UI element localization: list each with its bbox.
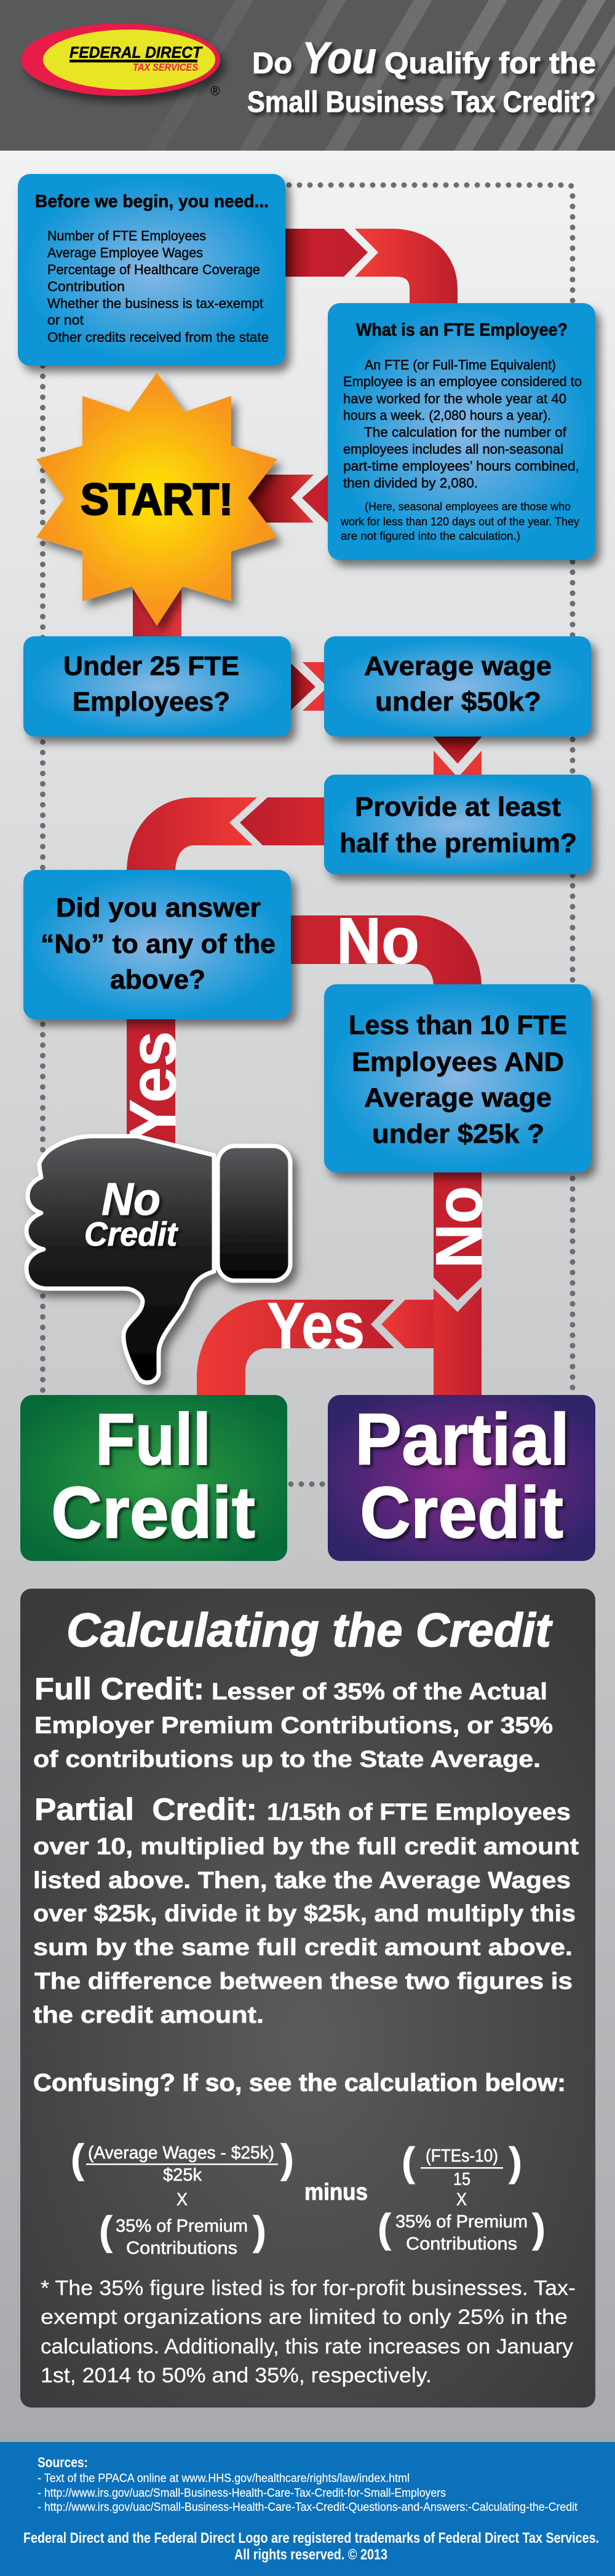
checklist: Contribution	[47, 279, 125, 294]
box: under 25 FTE: Under 25 FTE	[63, 651, 239, 681]
box: provide half the premium	[324, 775, 591, 874]
formula: left term: (	[71, 2136, 84, 2181]
formula: left term: X	[177, 2190, 188, 2210]
checklist: or not	[47, 312, 84, 328]
arrow: Yes branch to full credit	[197, 1289, 434, 1397]
label: Yes: Yes	[267, 1289, 365, 1362]
formula: right term: 35% of Premium	[395, 2212, 528, 2232]
logo: Federal Direct Tax Services: ®	[210, 84, 220, 98]
dotted path	[43, 185, 573, 1484]
box: provide half the premium: Provide at least	[355, 792, 561, 822]
sources	[38, 2454, 578, 2514]
panel: calculating the credit	[20, 1589, 595, 2408]
start star	[36, 373, 277, 626]
no credit label: No	[101, 1174, 161, 1225]
checklist: Whether the business is tax-exempt	[47, 296, 263, 311]
definition text: Employee is an employee considered to	[343, 374, 582, 389]
logo: Federal Direct Tax Services: FEDERAL DIRECT	[69, 43, 203, 61]
logo: Federal Direct Tax Services	[21, 23, 220, 98]
formula: right term: )	[532, 2205, 546, 2251]
no credit label	[84, 1174, 179, 1253]
title: You	[302, 34, 376, 83]
box: less than 10 FTE: Less than 10 FTE	[349, 1010, 567, 1040]
seasonal note: (Here, seasonal employees are those who	[365, 500, 571, 513]
partial credit explanation: listed above. Then, take the Average Wages	[33, 1868, 571, 1894]
minus: minus	[304, 2179, 368, 2205]
arrow: average wage down	[434, 735, 482, 776]
formula: right term: X	[456, 2190, 467, 2210]
heading: What is an FTE Employee?	[356, 320, 568, 340]
label: No: No	[422, 1186, 496, 1268]
partial credit explanation: the credit amount.	[33, 2002, 264, 2028]
formula: right term: (FTEs-10)	[426, 2146, 498, 2166]
full credit explanation: Employer Premium Contributions, or 35%	[34, 1713, 553, 1739]
arrow: provide premium to did you answer	[127, 797, 326, 873]
box: less than 10 FTE: Average wage	[364, 1083, 552, 1113]
label: Yes: Yes	[116, 1031, 189, 1142]
formula: right term	[378, 2139, 546, 2254]
checklist: Number of FTE Employees	[47, 228, 206, 243]
heading: Before we begin, you need...	[35, 192, 269, 211]
arrow: Yes branch to no credit	[116, 1017, 189, 1147]
start star: START!	[81, 475, 233, 524]
definition text: part-time employees’ hours combined,	[343, 459, 579, 473]
box: full credit	[20, 1395, 287, 1561]
header band	[0, 0, 615, 151]
partial credit explanation: over $25k, divide it by $25k, and multiply this	[33, 1901, 576, 1927]
box: did you answer no: “No” to any of the	[41, 929, 276, 959]
formula: left term: )	[280, 2136, 294, 2181]
trademark notice	[23, 2530, 599, 2563]
partial credit explanation: over 10, multiplied by the full credit amount	[33, 1834, 579, 1860]
arrow: No branch to partial credit	[422, 1171, 496, 1397]
trademark notice: All rights reserved. © 2013	[234, 2546, 387, 2563]
box: average wage under 50k: Average wage	[364, 651, 552, 681]
heading: Calculating the Credit	[66, 1604, 553, 1657]
definition text	[343, 357, 582, 491]
full credit explanation: of contributions up to the State Average.	[33, 1747, 541, 1772]
full credit explanation	[33, 1672, 553, 1772]
box: less than 10 FTE: under $25k ?	[372, 1119, 544, 1149]
arrow: No branch	[289, 904, 482, 987]
box: did you answer no: above?	[110, 965, 205, 995]
box: full credit: Credit	[51, 1472, 255, 1554]
box: full credit: Full	[95, 1399, 211, 1480]
sources: - http://www.irs.gov/uac/Small-Business-Health-Care-Tax-Credit-Questions-and-Answers:-Calculating-the-Credit	[38, 2501, 578, 2514]
full credit explanation: Lesser of 35% of the Actual	[212, 1679, 547, 1705]
box: partial credit	[328, 1395, 595, 1561]
footnote: calculations. Additionally, this rate increases on January	[41, 2335, 573, 2358]
footnote: * The 35% figure listed is for for-profit businesses. Tax-	[41, 2277, 576, 2300]
formula: left term: Contributions	[126, 2238, 237, 2258]
partial credit explanation: The difference between these two figures is	[34, 1969, 573, 1994]
definition text: An FTE (or Full-Time Equivalent)	[365, 357, 556, 373]
box: provide half the premium: half the premium?	[339, 828, 577, 858]
footer	[0, 2442, 615, 2576]
partial credit explanation: 1/15th of FTE Employees	[267, 1800, 571, 1825]
box: less than 10 FTE: Employees AND	[352, 1047, 564, 1077]
sources: - Text of the PPACA online at www.HHS.gov/healthcare/rights/law/index.html	[38, 2472, 410, 2485]
checklist: Other credits received from the state	[47, 330, 269, 345]
box: did you answer no	[23, 870, 291, 1019]
formula: right term: 15	[453, 2170, 470, 2189]
arrow: start down	[133, 584, 181, 639]
formula: right term: (	[402, 2139, 415, 2184]
label: No: No	[336, 904, 419, 978]
checklist	[47, 228, 269, 345]
formula: right term: )	[509, 2139, 522, 2184]
panel: before we begin	[18, 174, 285, 366]
formula: left term	[71, 2136, 294, 2258]
full credit explanation: Full Credit:	[34, 1672, 204, 1706]
footnote: exempt organizations are limited to only 25% in the	[41, 2305, 568, 2329]
confusing line: Confusing? If so, see the calculation below:	[33, 2069, 566, 2096]
partial credit explanation	[33, 1792, 579, 2028]
box: average wage under 50k: under $50k?	[375, 687, 541, 717]
title: Do	[252, 47, 292, 80]
title: Qualify for the	[384, 47, 596, 80]
sources: - http://www.irs.gov/uac/Small-Business-Health-Care-Tax-Credit-for-Small-Employers	[38, 2487, 446, 2500]
definition text: The calculation for the number of	[364, 424, 567, 440]
definition text: have worked for the whole year at 40	[343, 391, 566, 406]
formula: left term: $25k	[163, 2165, 202, 2185]
box: partial credit: Partial	[355, 1399, 569, 1480]
box: partial credit: Credit	[360, 1472, 563, 1554]
box: average wage under 50k	[324, 636, 591, 737]
formula: left term: (Average Wages - $25k)	[88, 2143, 274, 2163]
arrow: needs to FTE	[283, 229, 458, 307]
panel: what is an FTE employee	[328, 303, 595, 560]
arrow: under 25 to average wage	[289, 662, 326, 711]
partial credit explanation: sum by the same full credit amount above.	[33, 1935, 573, 1961]
icon: thumbs down, no credit	[26, 1136, 290, 1383]
definition text: then divided by 2,080.	[343, 475, 478, 491]
checklist: Percentage of Healthcare Coverage	[47, 262, 260, 277]
definition text: employees includes all non-seasonal	[343, 441, 563, 457]
no credit label: Credit	[84, 1215, 179, 1253]
sources: Sources:	[38, 2454, 88, 2470]
footnote: 1st, 2014 to 50% and 35%, respectively.	[41, 2364, 432, 2387]
formula: right term: (	[378, 2205, 391, 2251]
formula: left term: 35% of Premium	[116, 2216, 248, 2236]
title	[247, 34, 596, 119]
seasonal note: are not figured into the calculation.)	[341, 530, 520, 542]
partial credit explanation: Partial Credit:	[34, 1792, 257, 1827]
arrow: FTE to start	[246, 475, 332, 523]
box: under 25 FTE: Employees?	[73, 687, 230, 717]
box: did you answer no: Did you answer	[56, 893, 261, 923]
box: less than 10 FTE	[324, 984, 591, 1172]
box: under 25 FTE	[23, 636, 291, 737]
definition text: hours a week. (2,080 hours a year).	[343, 408, 551, 423]
formula: left term: (	[99, 2208, 113, 2253]
seasonal note	[340, 500, 579, 542]
logo: Federal Direct Tax Services: TAX SERVICES	[133, 62, 198, 73]
formula: left term: )	[253, 2208, 266, 2253]
seasonal note: work for less than 120 days out of the year. They	[340, 515, 579, 527]
footnote	[41, 2277, 576, 2387]
checklist: Average Employee Wages	[47, 245, 203, 261]
formula: right term: Contributions	[406, 2234, 517, 2254]
